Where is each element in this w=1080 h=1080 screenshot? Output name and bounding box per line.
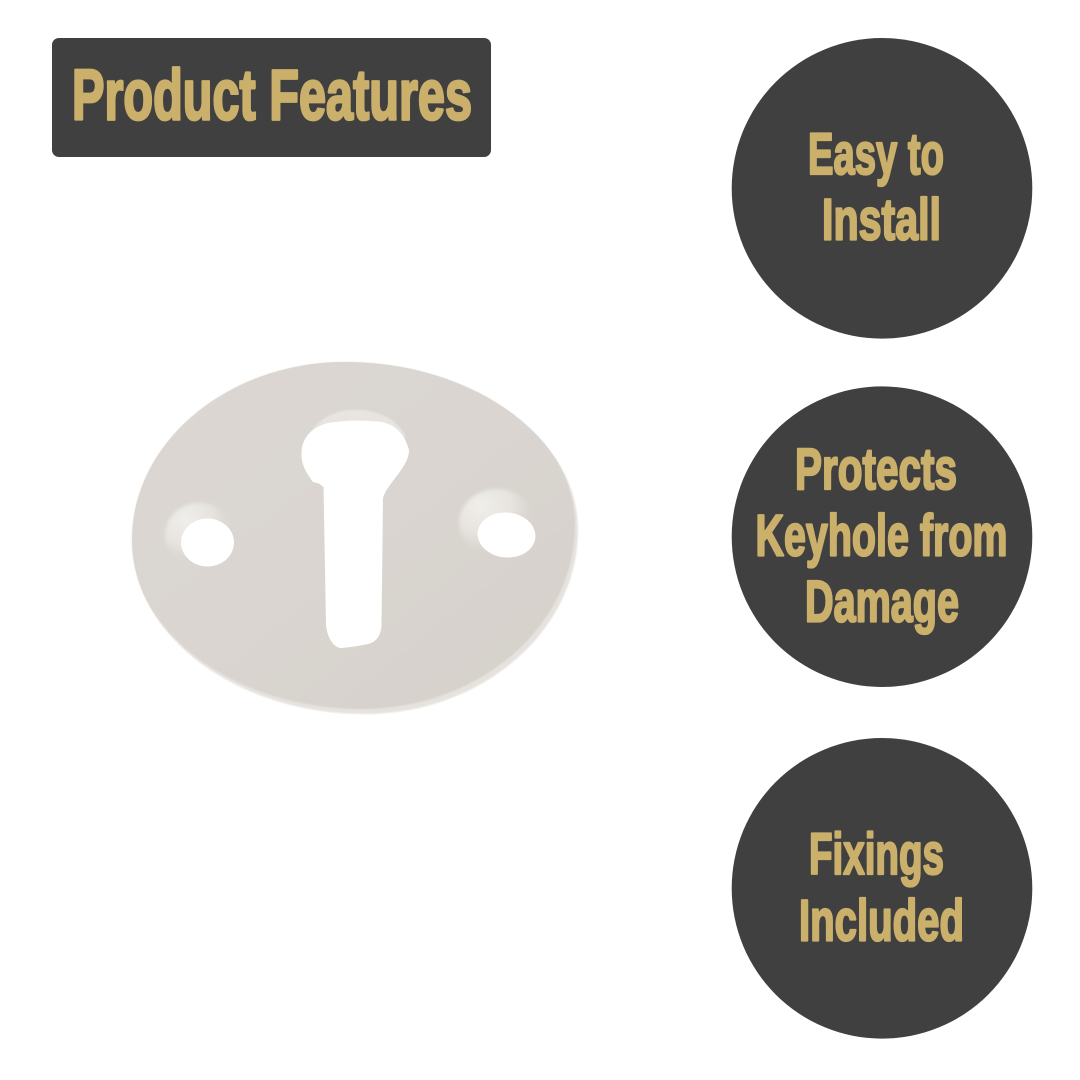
badge text: [756, 437, 1008, 634]
feature badge: protects keyhole from damage: [732, 386, 1032, 687]
left screw hole: [181, 518, 234, 566]
title banner: [52, 38, 491, 157]
feature badge: fixings included: [732, 738, 1032, 1039]
product image: round keyhole escutcheon plate: [129, 357, 578, 714]
plate face: [129, 357, 575, 709]
feature badge: easy to install: [732, 38, 1032, 339]
keyhole inner wall: [305, 410, 406, 445]
right screw hole: [476, 510, 537, 560]
badge text: Protects: [795, 437, 957, 502]
right screw hole dimple: [459, 489, 535, 557]
keyhole opening: [301, 421, 409, 648]
badge text: Included: [799, 888, 964, 954]
left screw hole dimple: [165, 503, 233, 567]
badge text: Damage: [805, 570, 959, 634]
badge text: [799, 822, 964, 954]
plate edge: [132, 362, 578, 714]
badge text: Easy to: [808, 122, 944, 187]
title text: Product Features: [72, 56, 472, 136]
badge text: [808, 122, 944, 252]
badge text: Fixings: [809, 822, 944, 887]
badge text: Install: [822, 188, 941, 252]
